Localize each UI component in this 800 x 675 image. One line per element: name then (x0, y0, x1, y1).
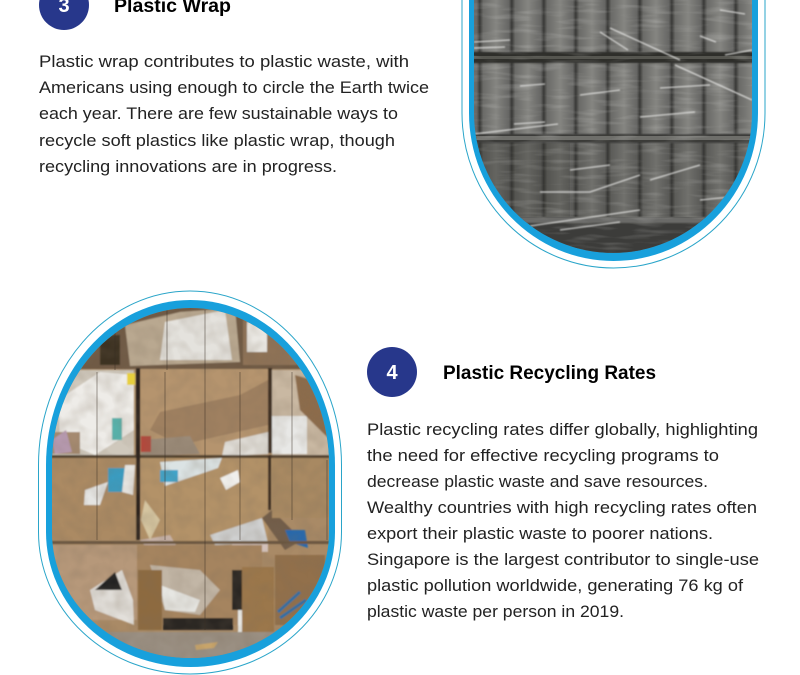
text block: plastic wrap description: Plastic wrap contributes to plastic waste, with (39, 52, 409, 71)
top row (80, 308, 300, 370)
panel: plastic wrap (39, 0, 765, 270)
text block: recycling rates description: export their plastic waste to poorer nations. (367, 524, 713, 543)
gaps (50, 455, 332, 458)
photo frame: baled waste (38, 291, 342, 674)
text block: plastic wrap description: Americans using enough to circle the Earth twice (39, 78, 429, 97)
middle row (52, 370, 134, 455)
photo: baled waste (50, 305, 332, 662)
number badge 4 (367, 347, 417, 397)
scraps along seams (139, 534, 176, 546)
lower row (52, 458, 136, 540)
text block: plastic wrap description: each year. There are few sustainable ways to (39, 104, 398, 123)
text block: recycling rates description: the need for effective recycling programs to (367, 446, 719, 465)
number badge 3 (39, 0, 89, 30)
panel: plastic recycling rates (38, 291, 759, 674)
number badge 4: 4 (386, 362, 398, 384)
text block: recycling rates description: decrease plastic waste and save resources. (367, 472, 708, 491)
baling wires (97, 310, 327, 630)
text block: recycling rates description: Singapore is the largest contributor to single-use (367, 550, 759, 569)
photo frame: wrapped cans (462, 0, 765, 270)
bottom row (52, 545, 137, 620)
text block: plastic wrap description (39, 52, 429, 176)
text block: recycling rates description: Wealthy countries with high recycling rates often (367, 498, 757, 517)
text block: plastic wrap description: recycling innovations are in progress. (39, 157, 337, 176)
text block: recycling rates description: Plastic recycling rates differ globally, highlighting (367, 420, 758, 439)
heading: plastic recycling rates: Plastic Recycling Rates (443, 362, 656, 384)
text block: recycling rates description: plastic waste per person in 2019. (367, 602, 624, 621)
text block: recycling rates description (367, 420, 759, 621)
text block: recycling rates description: plastic pollution worldwide, generating 76 kg of (367, 576, 743, 595)
photo: wrapped cans (474, 0, 752, 253)
text block: plastic wrap description: recycle soft plastics like plastic wrap, though (39, 131, 395, 150)
